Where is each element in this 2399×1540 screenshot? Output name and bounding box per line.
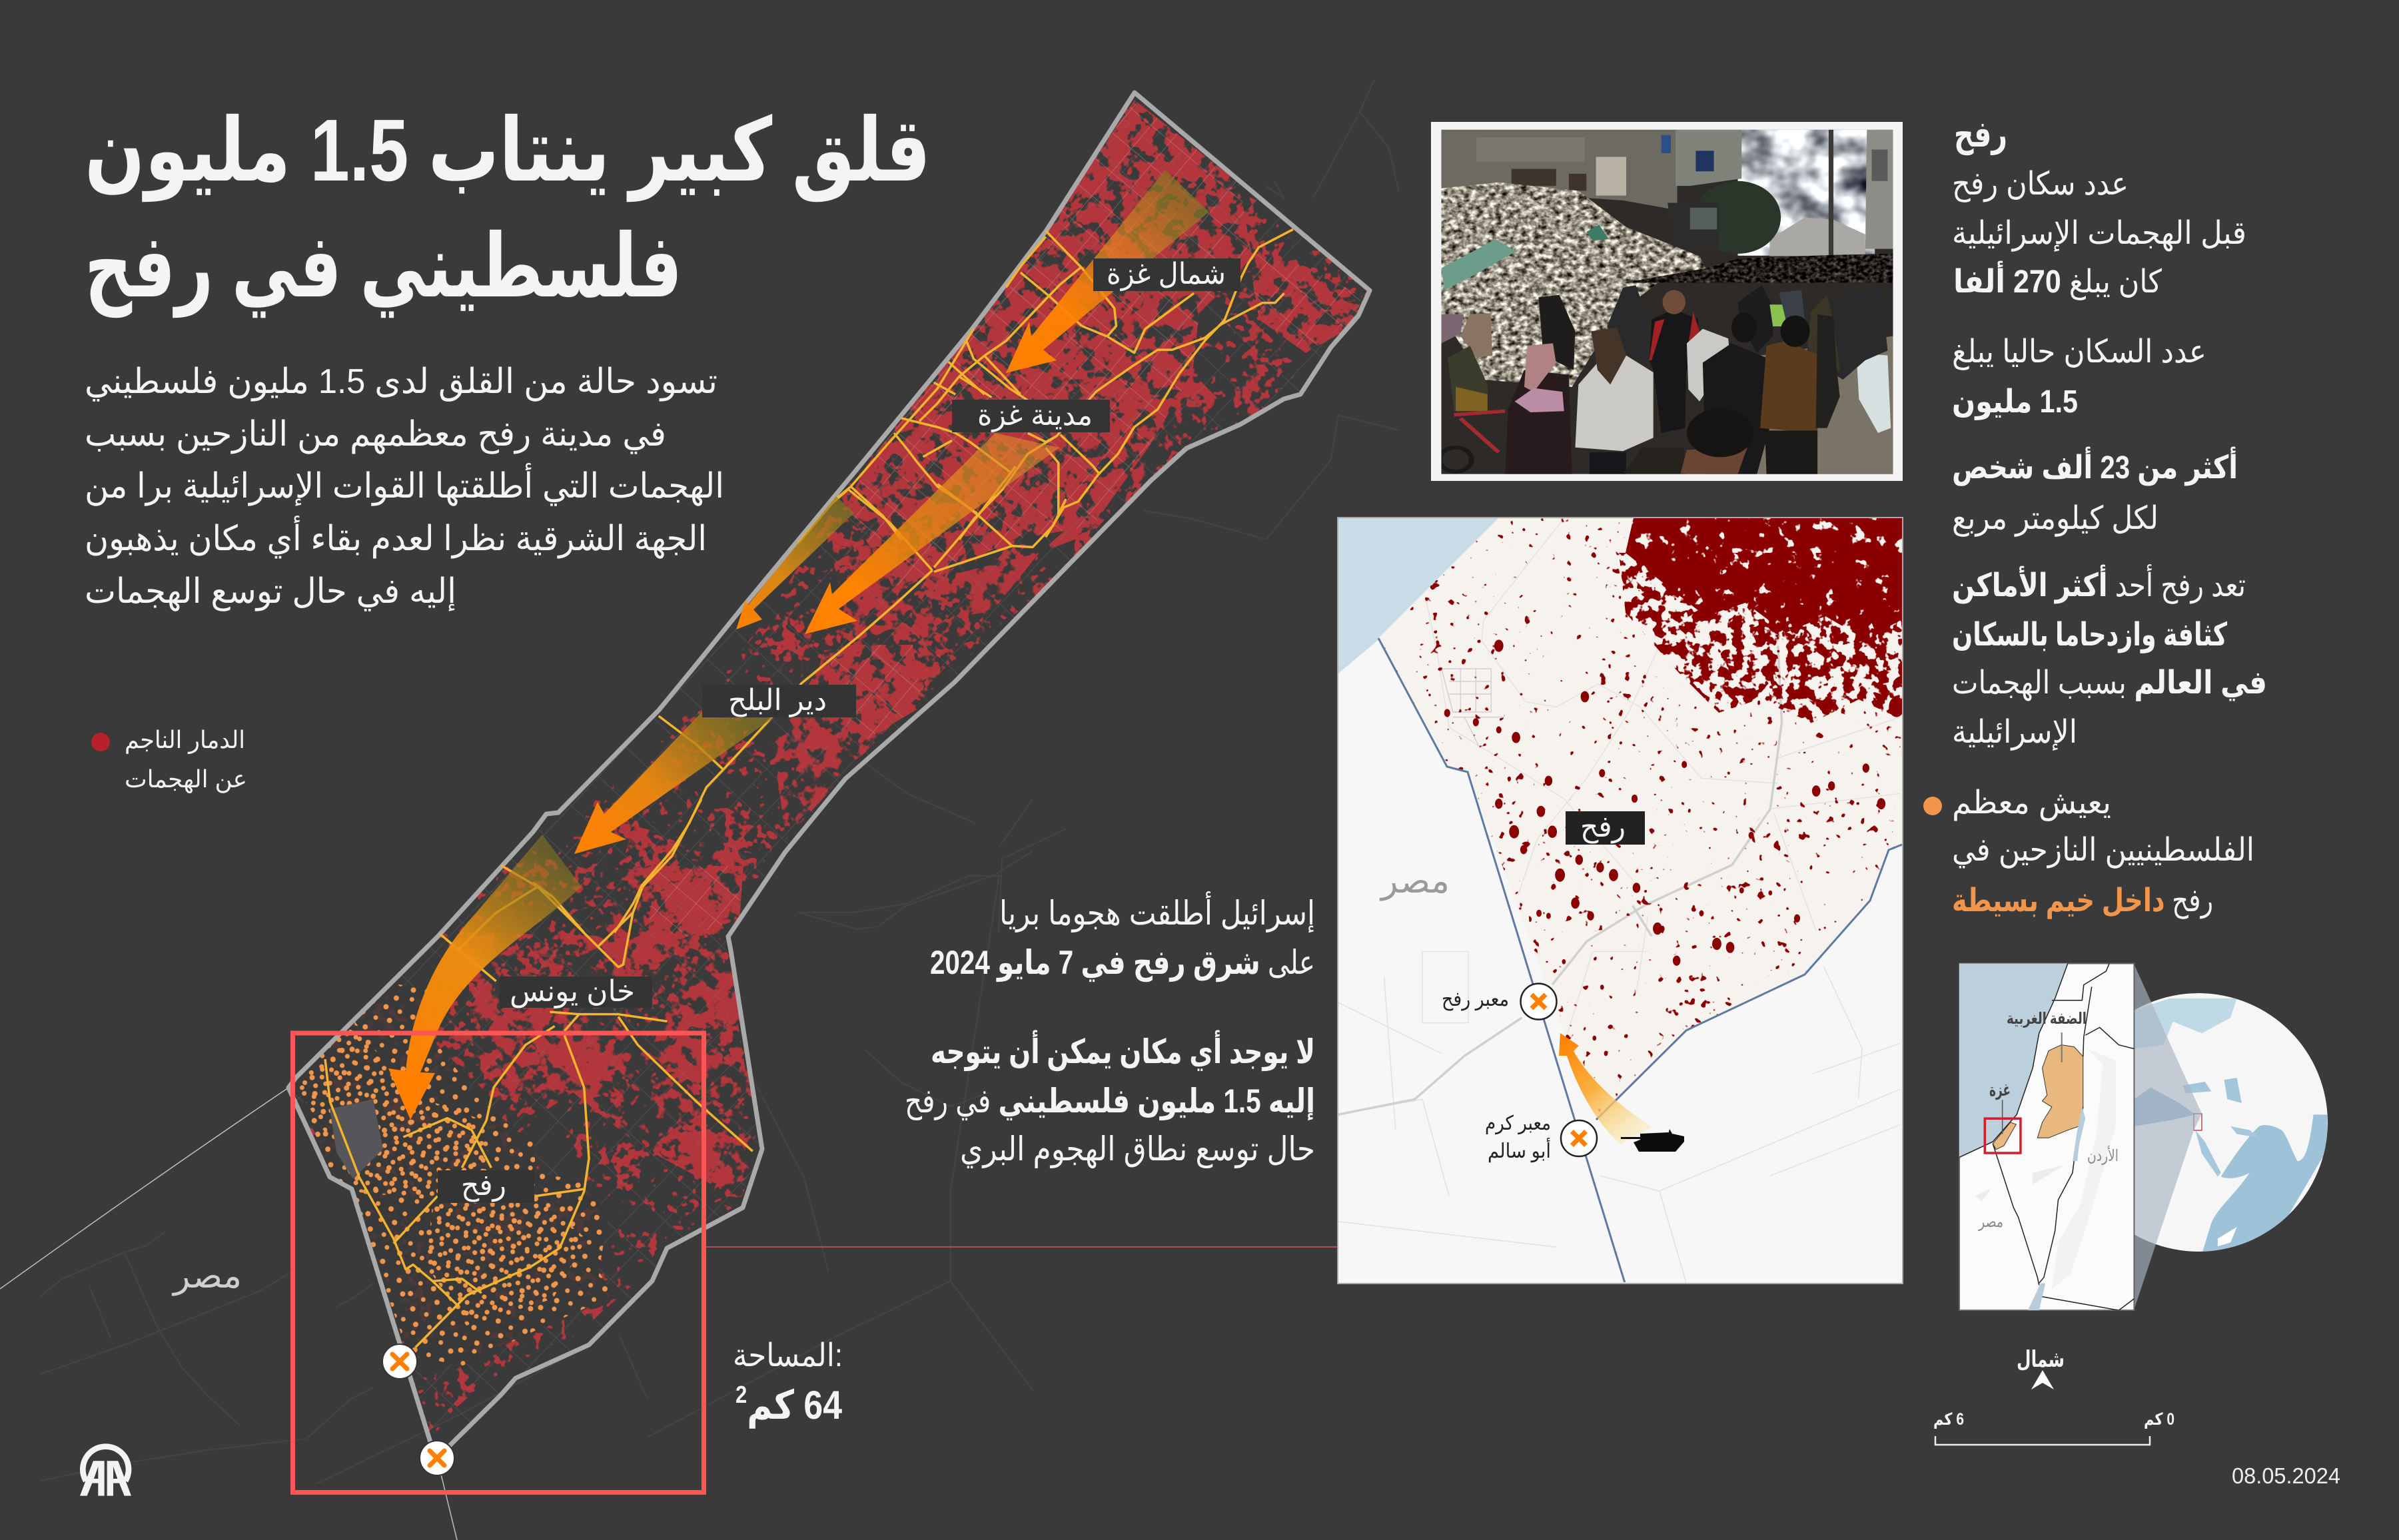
north indicator: شمال bbox=[2017, 1347, 2065, 1372]
inset crossing label: Rafah: معبر رفح bbox=[1442, 988, 1509, 1011]
inset crossing label: Kerem Shalom: أبو سالم bbox=[1488, 1137, 1551, 1163]
area text: :المساحة bbox=[733, 1338, 843, 1373]
inset label: Egypt: مصر bbox=[1379, 862, 1450, 901]
zoom cone bbox=[2134, 964, 2202, 1310]
ground offensive text bbox=[905, 891, 1315, 1169]
street grid in dense area bbox=[650, 102, 1361, 937]
population before: عدد سكان رفح bbox=[1952, 167, 2129, 202]
arrow: coastal route bbox=[736, 496, 854, 629]
crossing marker: Rafah bbox=[382, 1344, 417, 1379]
date: 08.05.2024 bbox=[2232, 1463, 2340, 1488]
locator label: Egypt: مصر bbox=[1978, 1213, 2003, 1231]
locator borders bbox=[1959, 964, 2134, 1310]
population now bbox=[1952, 334, 2206, 420]
crossing marker: Kerem Shalom bbox=[420, 1441, 454, 1475]
Gaza Strip outline bbox=[288, 93, 1370, 1458]
inset sea bbox=[1338, 518, 1499, 674]
scale bar bbox=[1933, 1410, 2174, 1445]
population now: 1.5 مليون bbox=[1952, 384, 2078, 420]
most crowded: تعد رفح أحد أكثر الأماكن bbox=[1952, 564, 2246, 604]
label: North Gaza: شمال غزة bbox=[1107, 258, 1226, 291]
street grid bbox=[286, 87, 1379, 1465]
legend dot bbox=[91, 733, 110, 751]
icon: tank bbox=[1621, 1129, 1684, 1152]
Gaza locator box bbox=[1985, 1118, 2021, 1153]
inset map: Rafah detail bbox=[1338, 518, 1904, 1284]
locator label: Jordan: الأردن bbox=[2087, 1146, 2119, 1165]
tents note: يعيش معظم bbox=[1952, 785, 2111, 821]
logo: Anadolu Agency bbox=[80, 1447, 131, 1496]
intro paragraph bbox=[85, 362, 724, 611]
Gaza leader bbox=[2002, 1100, 2003, 1134]
locator Gaza bbox=[1993, 1122, 2016, 1150]
intro paragraph: الجهة الشرقية نظرا لعدم بقاء أي مكان يذهبون bbox=[85, 516, 707, 559]
most crowded bbox=[1952, 564, 2267, 751]
globe locator bbox=[1959, 964, 2328, 1310]
ground offensive text: على شرق رفح في 7 مايو 2024 bbox=[930, 944, 1315, 982]
arrow: Gaza City to central Gaza bbox=[805, 433, 1059, 634]
tents note bbox=[1923, 785, 2254, 919]
most crowded: كثافة وازدحاما بالسكان bbox=[1952, 617, 2227, 653]
label: Rafah bbox=[438, 1169, 534, 1203]
scale bar: 6 كم bbox=[1933, 1410, 1964, 1429]
inset label: Rafah: رفح bbox=[1580, 811, 1626, 844]
intro paragraph: تسود حالة من القلق لدى 1.5 مليون فلسطيني bbox=[85, 362, 718, 402]
most crowded: الإسرائيلية bbox=[1952, 715, 2077, 751]
arrow: Deir al-Balah to Khan Younis bbox=[574, 707, 773, 854]
tents note: الفلسطينيين النازحين في bbox=[1952, 833, 2254, 869]
ground offensive text: إسرائيل أطلقت هجوما بريا bbox=[999, 891, 1315, 933]
inset crossing: Kerem Shalom bbox=[1561, 1120, 1597, 1156]
density: أكثر من 23 ألف شخص bbox=[1952, 446, 2238, 486]
area text bbox=[733, 1338, 843, 1429]
area text: 64 كم bbox=[747, 1383, 848, 1427]
map: Gaza Strip damage bbox=[286, 87, 1379, 1465]
right column statistics text bbox=[1923, 115, 2267, 919]
urban patch bbox=[330, 1099, 383, 1179]
photo: crowd beside rubble in Rafah bbox=[1431, 122, 1903, 481]
locator label: Gaza: غزة bbox=[1989, 1080, 2011, 1100]
legend: damage bbox=[91, 726, 247, 793]
main roads bbox=[325, 229, 1293, 1348]
ground offensive text: إليه 1.5 مليون فلسطيني في رفح bbox=[905, 1082, 1315, 1121]
inset crossing label: Kerem Shalom: معبر كرم bbox=[1485, 1112, 1551, 1134]
arrow: north Gaza to Gaza City bbox=[1006, 170, 1209, 373]
inset label: Rafah bbox=[1566, 811, 1645, 845]
label: Rafah: رفح bbox=[461, 1169, 506, 1202]
area text: 2 bbox=[735, 1381, 747, 1408]
intro paragraph: إليه في حال توسع الهجمات bbox=[85, 572, 456, 611]
title: فلسطيني في رفح bbox=[85, 217, 682, 318]
scale bar: 0 كم bbox=[2144, 1410, 2174, 1429]
population now: عدد السكان حاليا يبلغ bbox=[1952, 334, 2206, 370]
label: Egypt: مصر bbox=[171, 1257, 242, 1296]
population before bbox=[1952, 167, 2246, 300]
locator sea bbox=[1959, 964, 2068, 1157]
globe bbox=[2069, 993, 2328, 1254]
damage: high density bbox=[650, 100, 1362, 939]
locator terrain bbox=[1975, 1049, 2116, 1289]
label: Deir al-Balah bbox=[702, 684, 856, 717]
density: لكل كيلومتر مربع bbox=[1952, 501, 2159, 537]
coast and border lines bbox=[0, 1088, 457, 1540]
title: قلق كبير ينتاب 1.5 مليون bbox=[85, 101, 931, 202]
inset damage: scattered bbox=[1338, 518, 1903, 1284]
population before: كان يبلغ 270 ألفا bbox=[1953, 260, 2162, 300]
heading: Rafah: رفح bbox=[1954, 115, 2007, 155]
damage: medium density bbox=[466, 374, 1218, 1190]
arrow: Khan Younis to Rafah bbox=[388, 835, 582, 1120]
inset crossing: Rafah bbox=[1520, 984, 1556, 1020]
inset roads bbox=[1338, 518, 1900, 1283]
most crowded: في العالم بسبب الهجمات bbox=[1952, 665, 2267, 701]
West Bank leader bbox=[2061, 1032, 2063, 1062]
ground offensive text: حال توسع نطاق الهجوم البري bbox=[960, 1130, 1315, 1169]
locator West Bank bbox=[2037, 1045, 2083, 1138]
label: Khan Younis: خان يونس bbox=[510, 975, 635, 1008]
globe marker bbox=[2194, 1114, 2202, 1130]
damage: scattered bbox=[286, 87, 1379, 1465]
inset damage: clusters bbox=[1444, 639, 1904, 1056]
label: Deir al-Balah: دير البلح bbox=[728, 684, 827, 717]
inset Gaza land bbox=[1378, 518, 1902, 1120]
locator lakes bbox=[2028, 1107, 2085, 1310]
inset attack arrow bbox=[1559, 1033, 1652, 1144]
connector line to inset bbox=[706, 1246, 1338, 1248]
intro paragraph: الهجمات التي أطلقتها القوات الإسرائيلية برا من bbox=[85, 463, 724, 506]
legend text: الدمار الناجم bbox=[125, 726, 245, 754]
locator label: West Bank: الضفة الغربية bbox=[2007, 1010, 2087, 1028]
inset damage: fringe bbox=[1338, 518, 1903, 1284]
population before: قبل الهجمات الإسرائيلية bbox=[1952, 216, 2246, 252]
tents note: رفح داخل خيم بسيطة bbox=[1952, 883, 2213, 919]
faint background roads bbox=[40, 79, 1399, 1484]
inset border line bbox=[1378, 638, 1902, 1283]
density bbox=[1952, 446, 2238, 537]
inset damage: dense mass bbox=[1338, 518, 1903, 1284]
inset crossing label: Kerem Shalom bbox=[1485, 1112, 1551, 1163]
locator map bbox=[1959, 964, 2134, 1310]
intro paragraph: في مدينة رفح معظمهم من النازحين بسبب bbox=[85, 415, 666, 454]
legend text bbox=[125, 726, 247, 793]
label: Gaza City: مدينة غزة bbox=[977, 399, 1093, 432]
orange displaced-people dots bbox=[286, 979, 620, 1372]
north indicator bbox=[2017, 1347, 2065, 1389]
title bbox=[85, 101, 931, 318]
legend text: عن الهجمات bbox=[125, 765, 247, 793]
Rafah focus rectangle bbox=[293, 1033, 704, 1492]
ground offensive text: لا يوجد أي مكان يمكن أن يتوجه bbox=[931, 1030, 1315, 1072]
